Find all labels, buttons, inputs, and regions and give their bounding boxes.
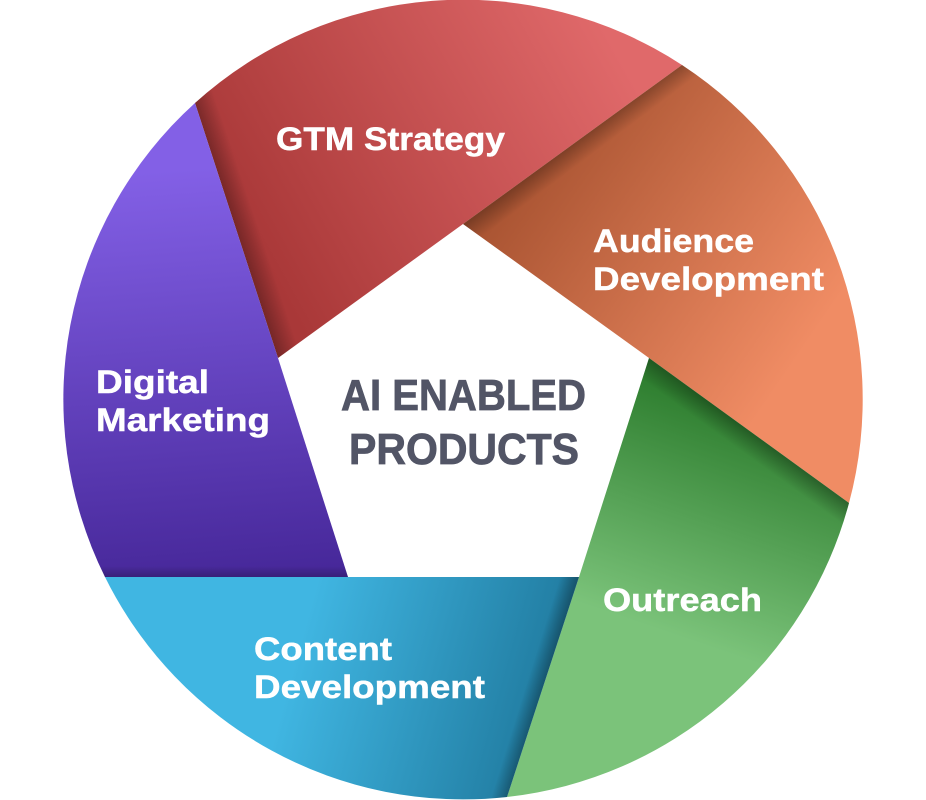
label: Digital Marketing: Digital bbox=[96, 364, 209, 400]
label: Content Development: Content bbox=[254, 631, 392, 667]
panel: Audience Development segment bbox=[463, 65, 863, 503]
panel: Outreach segment bbox=[507, 358, 849, 797]
center title: AI Enabled Products: AI ENABLED bbox=[341, 371, 586, 420]
label: Digital Marketing: Marketing bbox=[96, 402, 270, 438]
label: Audience Development: Audience bbox=[593, 223, 754, 259]
label: Audience Development: Development bbox=[593, 261, 824, 297]
label: Content Development: Development bbox=[254, 669, 485, 705]
label: Outreach: Outreach bbox=[603, 582, 762, 618]
center title: AI Enabled Products: PRODUCTS bbox=[349, 425, 579, 474]
panel: GTM Strategy segment bbox=[195, 0, 682, 358]
label: GTM Strategy: GTM Strategy bbox=[276, 121, 505, 157]
panel: Digital Marketing segment bbox=[63, 103, 348, 577]
panel: Content Development segment bbox=[105, 577, 579, 799]
